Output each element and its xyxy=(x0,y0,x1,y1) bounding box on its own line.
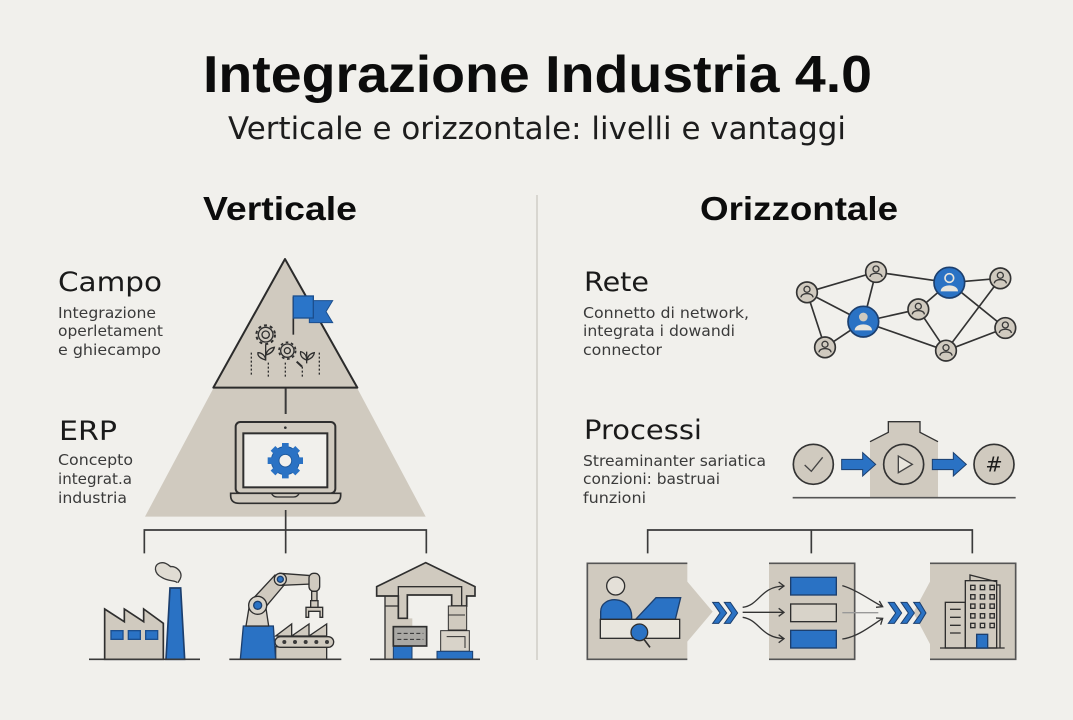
panel: company building xyxy=(888,563,1016,659)
panel: process bars xyxy=(743,563,883,659)
pyramid xyxy=(145,259,426,517)
text block: ERP: ERP xyxy=(59,416,117,447)
icon: chevrons xyxy=(713,602,738,623)
text block: Rete xyxy=(583,267,749,359)
arrow xyxy=(932,453,966,476)
pyramid upper tier: Campo xyxy=(213,259,357,388)
bracket connector xyxy=(648,530,972,553)
text block: ERP xyxy=(58,416,133,507)
icon: factory with chimney xyxy=(89,563,200,659)
icon: blue flag xyxy=(293,296,333,335)
panel: operator xyxy=(587,563,713,659)
text block: Rete: connector xyxy=(583,341,663,359)
heading: Orizzontale: Orizzontale xyxy=(700,190,898,227)
icon: warehouse with gantry xyxy=(370,563,480,659)
text block: Campo: e ghiecampo xyxy=(58,341,161,359)
bracket connector xyxy=(144,510,426,553)
icon: laptop with gear xyxy=(231,422,341,503)
text block: ERP: industria xyxy=(58,489,127,507)
text block: Processi: funzioni xyxy=(583,489,646,507)
horizontal value chain xyxy=(587,530,1016,659)
text block: Rete: integrata i dowandi xyxy=(583,322,735,340)
network diagram xyxy=(797,262,1016,361)
process flow: # xyxy=(985,453,1003,477)
arrow xyxy=(842,453,876,476)
text block: Processi xyxy=(583,415,766,507)
subtitle: Verticale e orizzontale: livelli e vantaggi xyxy=(228,111,846,147)
connectors and factory icons xyxy=(89,510,480,659)
text block: Processi: Streaminanter sariatica xyxy=(583,452,766,470)
text block: Processi: Processi xyxy=(584,415,702,446)
text block: Campo xyxy=(58,267,163,359)
pyramid lower tier: ERP xyxy=(145,388,426,517)
title: Integrazione Industria 4.0 xyxy=(203,46,872,104)
network and process diagrams xyxy=(793,262,1016,498)
text block: Rete: Connetto di network, xyxy=(583,304,749,322)
text block: ERP: Concepto xyxy=(58,451,133,469)
text block: Campo: Campo xyxy=(58,267,162,298)
icon: blue gear xyxy=(268,443,303,478)
heading: Verticale: Verticale xyxy=(203,190,357,227)
text block: Rete: Rete xyxy=(584,267,649,298)
icon: field flowers and gears xyxy=(251,325,319,377)
text block: Processi: conzioni: bastruai xyxy=(583,470,720,488)
text block: ERP: integrat.a xyxy=(58,470,132,488)
text block: Campo: operletament xyxy=(58,322,163,340)
text block: Campo: Integrazione xyxy=(58,304,156,322)
icon: robot arm with conveyor xyxy=(229,573,341,659)
process flow xyxy=(793,422,1016,498)
